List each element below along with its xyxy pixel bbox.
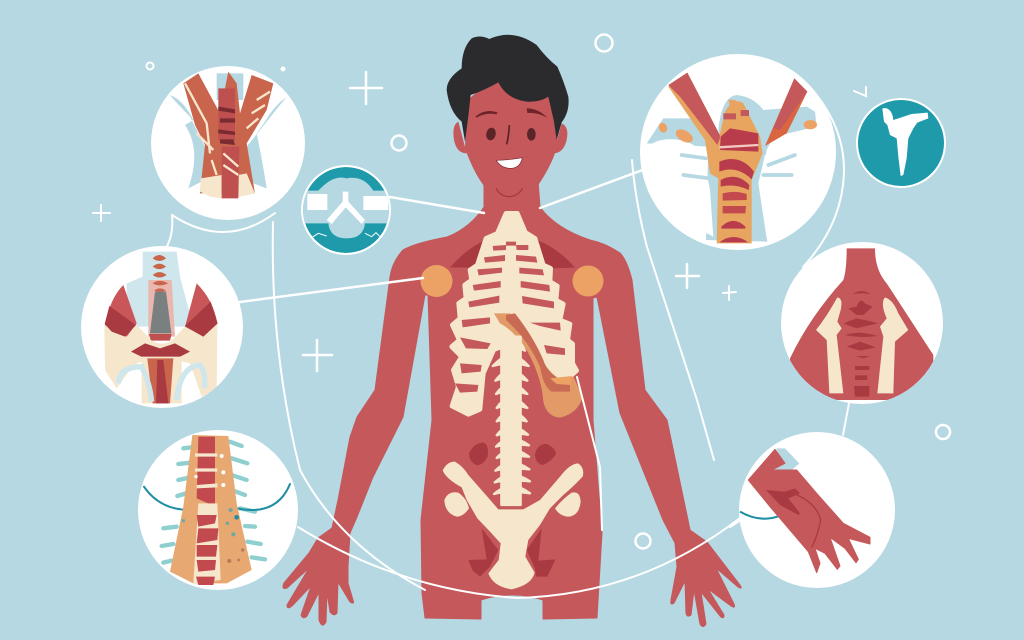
eyebrows (475, 108, 547, 118)
circle: lower spine detail (138, 430, 298, 590)
orange tissue (170, 435, 252, 583)
ears (453, 122, 567, 153)
circle: upper throat detail (151, 66, 305, 220)
tracheal rings (719, 159, 754, 179)
teal rib strokes (162, 442, 265, 563)
decorative plus signs and rings (93, 34, 950, 548)
teal nerve (144, 484, 290, 510)
head (447, 35, 569, 212)
body silhouette with arms and hands (283, 180, 741, 626)
lower muscles (468, 528, 555, 577)
chin line (496, 188, 523, 197)
blue column (127, 252, 193, 327)
side muscles (105, 283, 217, 337)
nose (507, 125, 509, 144)
connector lines (165, 85, 850, 598)
mouth (496, 158, 522, 168)
blue cuff (774, 448, 800, 470)
skeleton (443, 213, 583, 589)
kidneys (469, 442, 556, 465)
circle: teal airway icon (297, 165, 397, 255)
infographic (81, 33, 952, 627)
orange organ (494, 313, 583, 418)
circle: upper right trachea detail (641, 55, 835, 249)
spine (493, 334, 530, 505)
circle: teal bone icon (857, 99, 945, 187)
cream bones (816, 297, 843, 393)
pelvic floor muscle (131, 343, 190, 358)
blue fingers (682, 155, 795, 178)
orange spots (658, 122, 668, 132)
left shoulder joint (420, 265, 452, 297)
right shoulder joint (572, 266, 604, 296)
right muscle band (765, 78, 807, 146)
cream gaps (195, 453, 217, 488)
white forms (307, 192, 388, 224)
vertebra stack (153, 255, 168, 292)
pectoral muscles (450, 239, 575, 268)
circle: pelvic detail (81, 246, 243, 408)
rib cage (452, 213, 577, 414)
figure: human body (283, 35, 741, 627)
trachea (717, 101, 763, 243)
eyes (485, 127, 497, 141)
dark muscle (766, 488, 800, 515)
pelvis (443, 462, 583, 589)
specks (182, 508, 244, 563)
left muscle band (668, 73, 721, 180)
red vertebrae (196, 437, 218, 585)
hair (447, 35, 569, 142)
teal nerve (740, 512, 780, 519)
vessel line (795, 494, 821, 547)
central canal (147, 358, 173, 403)
circle: mid right chest detail (781, 242, 943, 404)
blue arcs (118, 365, 205, 402)
blue background shapes (170, 73, 287, 188)
face (465, 81, 558, 212)
cream pelvis (104, 323, 217, 397)
light band (303, 178, 389, 238)
cream column (193, 503, 221, 583)
rib gaps (455, 242, 565, 393)
pale strip (719, 145, 758, 147)
pelvis side bones (444, 492, 581, 517)
central dark marks (843, 291, 878, 397)
teal ring (303, 167, 389, 253)
waves (311, 233, 382, 238)
cream beside canal (142, 357, 182, 403)
bone (882, 108, 928, 176)
red tissue (790, 248, 933, 400)
forearm and hand (748, 449, 870, 573)
grey canal (150, 292, 171, 333)
blue background (647, 95, 817, 242)
circle: lower right hand detail (739, 432, 895, 588)
white lobes (647, 139, 713, 237)
throat muscle bundle (183, 72, 273, 193)
